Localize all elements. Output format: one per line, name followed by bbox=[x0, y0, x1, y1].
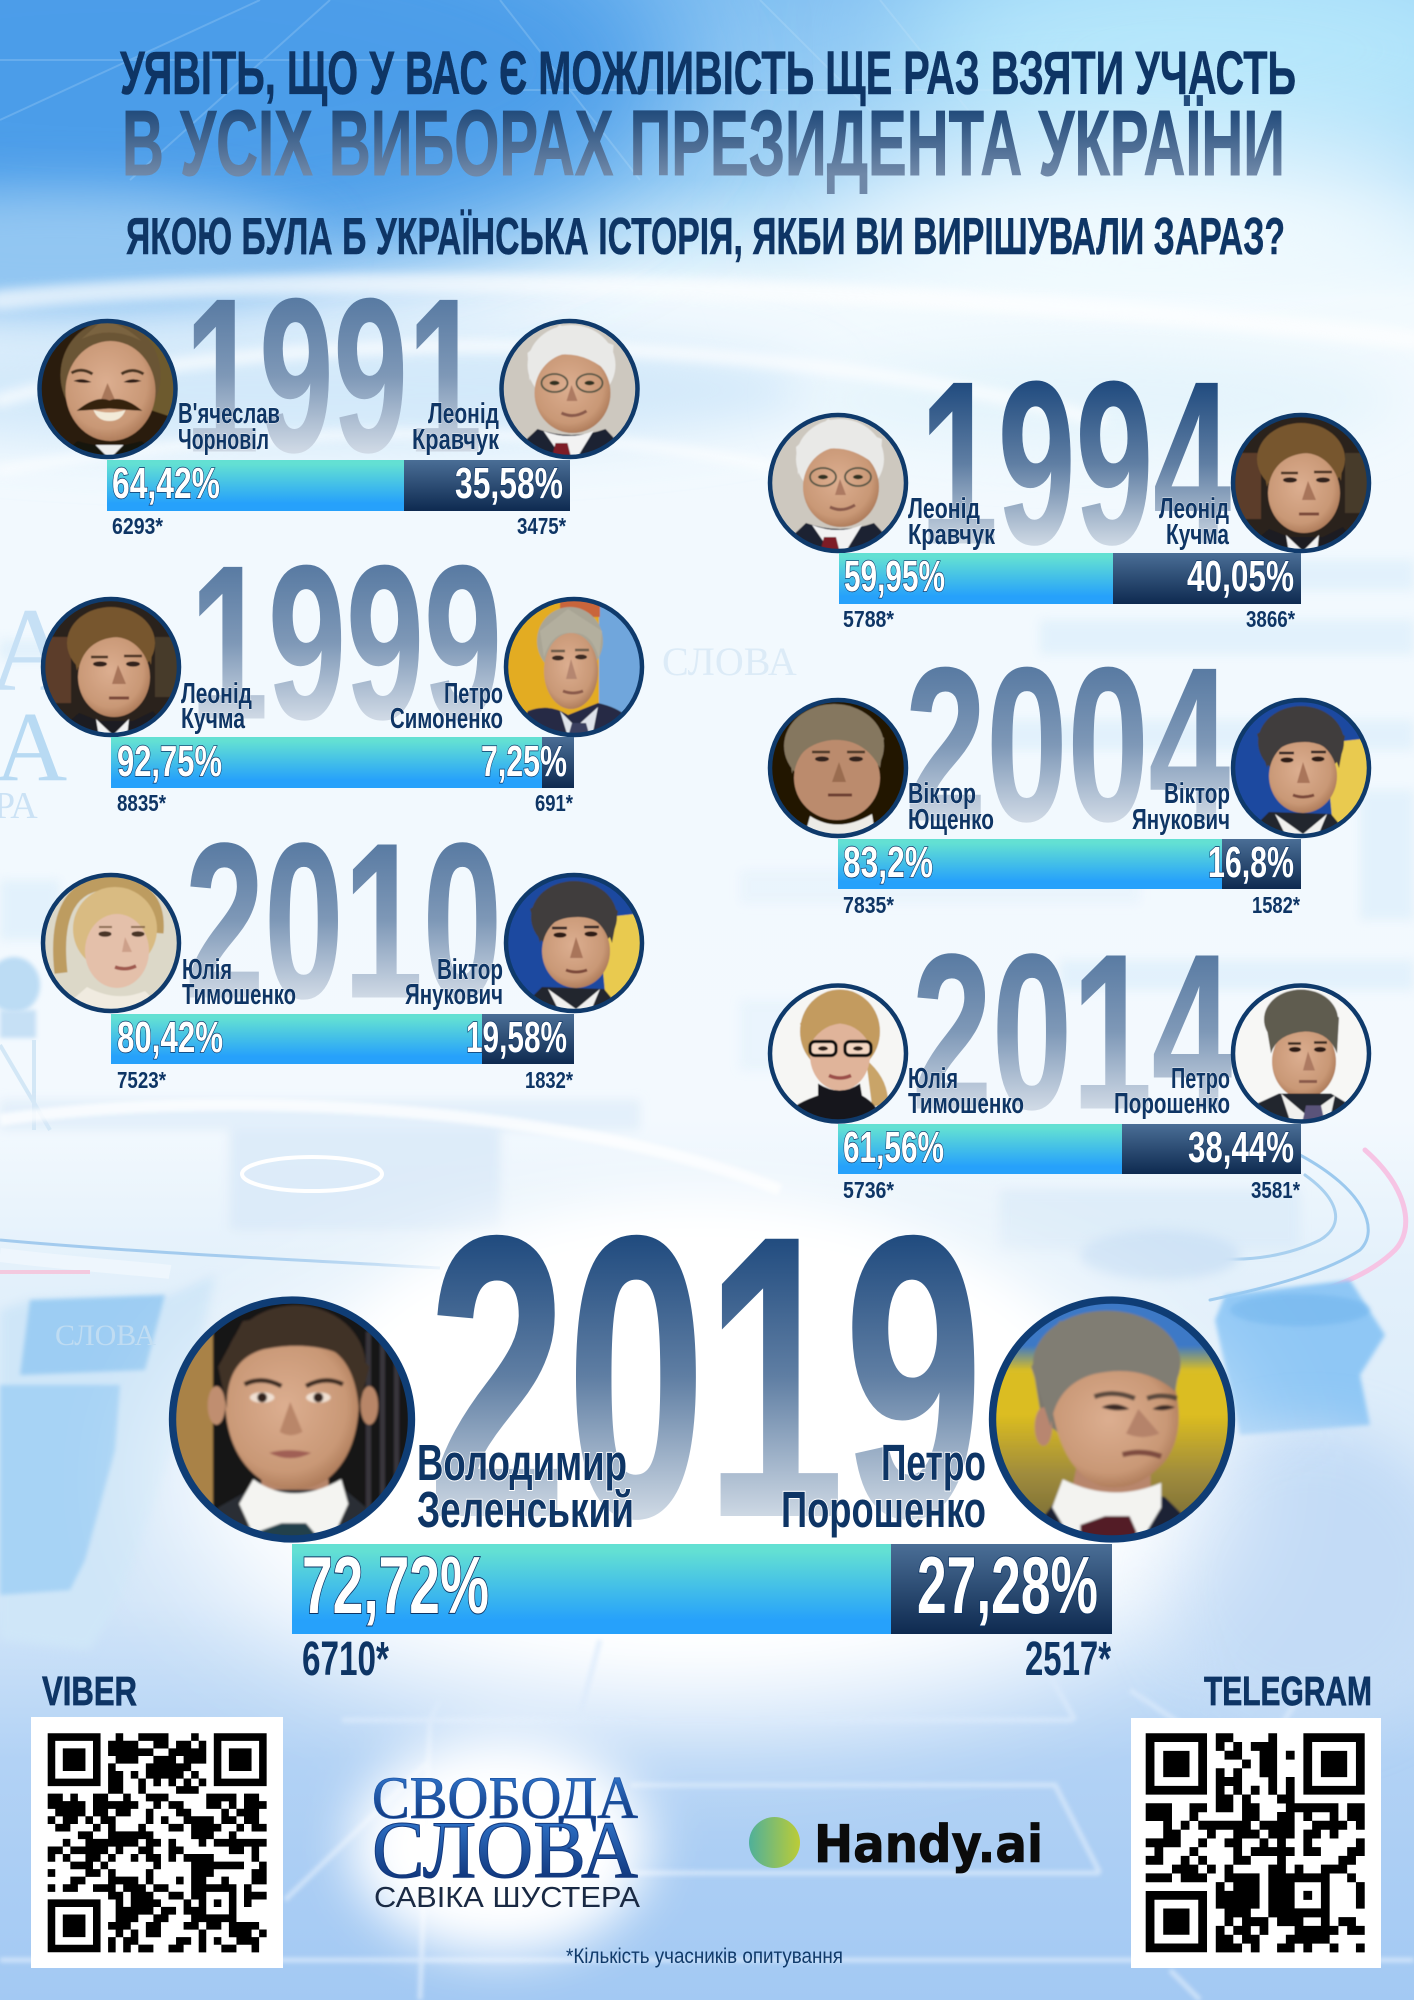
candidate names: Леонід bbox=[181, 678, 252, 710]
vote counts: 7523* bbox=[117, 1067, 166, 1093]
logo: Svoboda Slova: СВОБОДА bbox=[372, 1765, 638, 1831]
year 2014: 2014 bbox=[912, 908, 1232, 1155]
year 1991: 1991 bbox=[185, 254, 482, 498]
vote counts bbox=[843, 606, 1295, 632]
portrait: Yanukovych bbox=[504, 873, 644, 1013]
panel: 1994 bbox=[768, 334, 1371, 632]
logo: Handy.ai: Handy.ai bbox=[814, 1815, 1043, 1875]
vote counts: 3581* bbox=[1251, 1177, 1300, 1203]
vote counts: 1582* bbox=[1252, 892, 1300, 918]
portrait: Kravchuk bbox=[500, 319, 640, 459]
vote counts bbox=[843, 892, 1300, 918]
portrait: Yanukovych bbox=[1231, 698, 1371, 838]
candidate names: Віктор bbox=[1164, 778, 1230, 810]
candidate names: Янукович bbox=[405, 979, 503, 1011]
candidate names: Юлія bbox=[182, 954, 232, 986]
vote counts: 5736* bbox=[843, 1177, 894, 1203]
candidate names: Янукович bbox=[1132, 804, 1230, 836]
portrait: Symonenko bbox=[504, 597, 644, 737]
portrait: Kuchma bbox=[1231, 413, 1371, 553]
vote counts: 3475* bbox=[517, 513, 566, 539]
heading: Viber: VIBER bbox=[42, 1668, 137, 1714]
candidate names bbox=[417, 1434, 986, 1538]
background: studio scene: СЛОВА bbox=[662, 639, 797, 684]
result bar bbox=[111, 737, 574, 788]
portrait: Kuchma bbox=[41, 597, 181, 737]
logo: Svoboda Slova: СЛОВА bbox=[372, 1804, 638, 1895]
candidate names bbox=[182, 954, 503, 1011]
candidate names bbox=[908, 1063, 1230, 1120]
vote counts: 1832* bbox=[525, 1067, 573, 1093]
logo: Svoboda Slova: САВІКА ШУСТЕРА bbox=[374, 1882, 641, 1914]
portrait: Poroshenko 2014 bbox=[1231, 984, 1371, 1124]
candidate names: Кравчук bbox=[908, 519, 995, 551]
portrait: Zelensky bbox=[169, 1297, 415, 1542]
vote counts: 8835* bbox=[117, 790, 166, 816]
result bar: 64,42% bbox=[112, 459, 220, 508]
candidate names: Зеленський bbox=[417, 1481, 634, 1538]
candidate names: Петро bbox=[444, 678, 503, 710]
result bar: 92,75% bbox=[117, 737, 222, 786]
panel: 1991 bbox=[38, 254, 640, 539]
candidate names: Чорновіл bbox=[178, 424, 269, 456]
result bar bbox=[838, 838, 1301, 889]
vote counts: 7835* bbox=[843, 892, 894, 918]
candidate names: Ющенко bbox=[908, 804, 994, 836]
candidate names bbox=[178, 398, 499, 456]
result bar: 72,72% bbox=[302, 1541, 489, 1631]
vote counts: 2517* bbox=[1025, 1633, 1111, 1686]
portrait: Tymoshenko 2014 bbox=[768, 984, 908, 1124]
title bbox=[120, 39, 1296, 266]
result bar bbox=[107, 459, 570, 511]
panel: 2019 bbox=[169, 1153, 1235, 1686]
candidate names: Віктор bbox=[437, 954, 503, 986]
result bar: 16,8% bbox=[1208, 838, 1294, 887]
year 2019: 2019 bbox=[428, 1153, 983, 1600]
portrait: Poroshenko 2019 bbox=[989, 1297, 1235, 1542]
result bar: 61,56% bbox=[843, 1123, 944, 1172]
result bar: 27,28% bbox=[917, 1541, 1098, 1631]
candidate names: Віктор bbox=[908, 778, 976, 810]
candidate names: Леонід bbox=[908, 493, 980, 525]
vote counts bbox=[117, 790, 573, 816]
vote counts: 5788* bbox=[843, 606, 894, 632]
result bar bbox=[292, 1541, 1112, 1634]
candidate names: Кравчук bbox=[412, 424, 499, 456]
portrait: Kravchuk bbox=[768, 413, 908, 553]
candidate names bbox=[181, 678, 503, 735]
candidate names: Кучма bbox=[1166, 519, 1230, 551]
candidate names: Порошенко bbox=[781, 1481, 986, 1538]
candidate names: Володимир bbox=[417, 1434, 627, 1491]
year 2004: 2004 bbox=[905, 623, 1230, 867]
panel: 2014 bbox=[768, 908, 1371, 1203]
candidate names: Симоненко bbox=[390, 703, 503, 735]
year 2010: 2010 bbox=[185, 797, 502, 1044]
candidate names: Леонід bbox=[1159, 493, 1229, 525]
result bar: 38,44% bbox=[1188, 1123, 1294, 1172]
result bar: 19,58% bbox=[466, 1013, 567, 1062]
result bar: 35,58% bbox=[455, 459, 563, 508]
portrait: Yushchenko bbox=[768, 698, 908, 838]
panel: 2004 bbox=[768, 623, 1371, 918]
QR code: Telegram bbox=[1131, 1718, 1381, 1968]
portrait: Chornovil bbox=[38, 319, 178, 459]
result bar: 40,05% bbox=[1187, 552, 1294, 601]
vote counts bbox=[302, 1633, 1111, 1686]
QR code: Viber bbox=[31, 1717, 283, 1968]
candidate names: В'ячеслав bbox=[178, 398, 280, 430]
candidate names: Леонід bbox=[428, 398, 499, 430]
candidate names: Тимошенко bbox=[908, 1088, 1024, 1120]
panel: 1999 bbox=[41, 521, 644, 816]
result bar: 83,2% bbox=[843, 838, 933, 887]
result bar: 80,42% bbox=[117, 1013, 223, 1062]
footnote: *Кількість учасників опитування bbox=[566, 1945, 843, 1968]
year 1999: 1999 bbox=[190, 521, 502, 765]
portrait: Tymoshenko 2010 bbox=[41, 873, 181, 1013]
vote counts: 691* bbox=[535, 790, 573, 816]
candidate names: Петро bbox=[881, 1434, 986, 1491]
vote counts bbox=[112, 513, 566, 539]
result bar: 7,25% bbox=[481, 737, 567, 786]
result bar bbox=[839, 552, 1301, 604]
result bar bbox=[838, 1123, 1301, 1174]
candidate names: Кучма bbox=[181, 703, 246, 735]
candidate names: Петро bbox=[1171, 1063, 1230, 1095]
panel: 2010 bbox=[41, 797, 644, 1093]
logo: Svoboda Slova bbox=[372, 1765, 641, 1914]
candidate names bbox=[908, 778, 1230, 836]
vote counts: 3866* bbox=[1246, 606, 1295, 632]
result bar bbox=[111, 1013, 574, 1064]
background: studio scene: СЛОВА bbox=[55, 1319, 156, 1352]
vote counts bbox=[843, 1177, 1300, 1203]
vote counts: 6293* bbox=[112, 513, 163, 539]
vote counts bbox=[117, 1067, 573, 1093]
candidate names: Порошенко bbox=[1114, 1088, 1230, 1120]
candidate names: Тимошенко bbox=[182, 979, 296, 1011]
result bar: 59,95% bbox=[844, 552, 945, 601]
vote counts: 6710* bbox=[302, 1633, 389, 1686]
candidate names bbox=[908, 493, 1230, 551]
candidate names: Юлія bbox=[908, 1063, 958, 1095]
